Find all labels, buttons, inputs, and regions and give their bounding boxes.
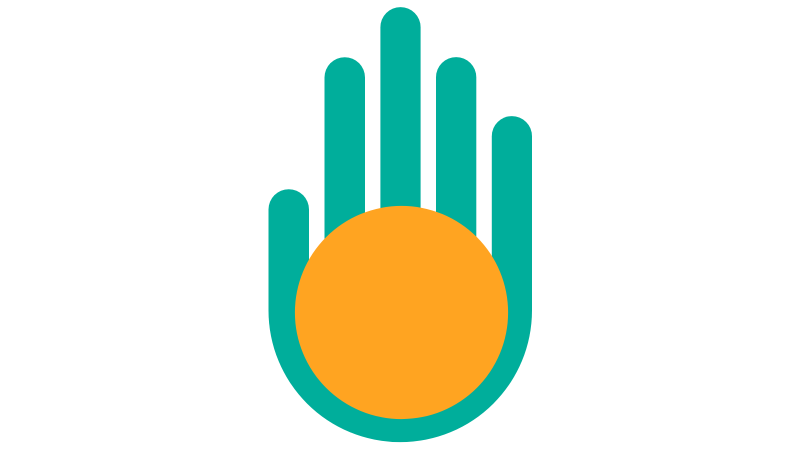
palm	[268, 310, 532, 442]
orange circle	[295, 206, 508, 419]
thumb	[268, 189, 309, 311]
hand	[268, 7, 532, 442]
ring finger	[436, 57, 476, 280]
index finger	[324, 57, 365, 280]
middle finger	[380, 7, 421, 280]
little finger	[492, 116, 532, 311]
